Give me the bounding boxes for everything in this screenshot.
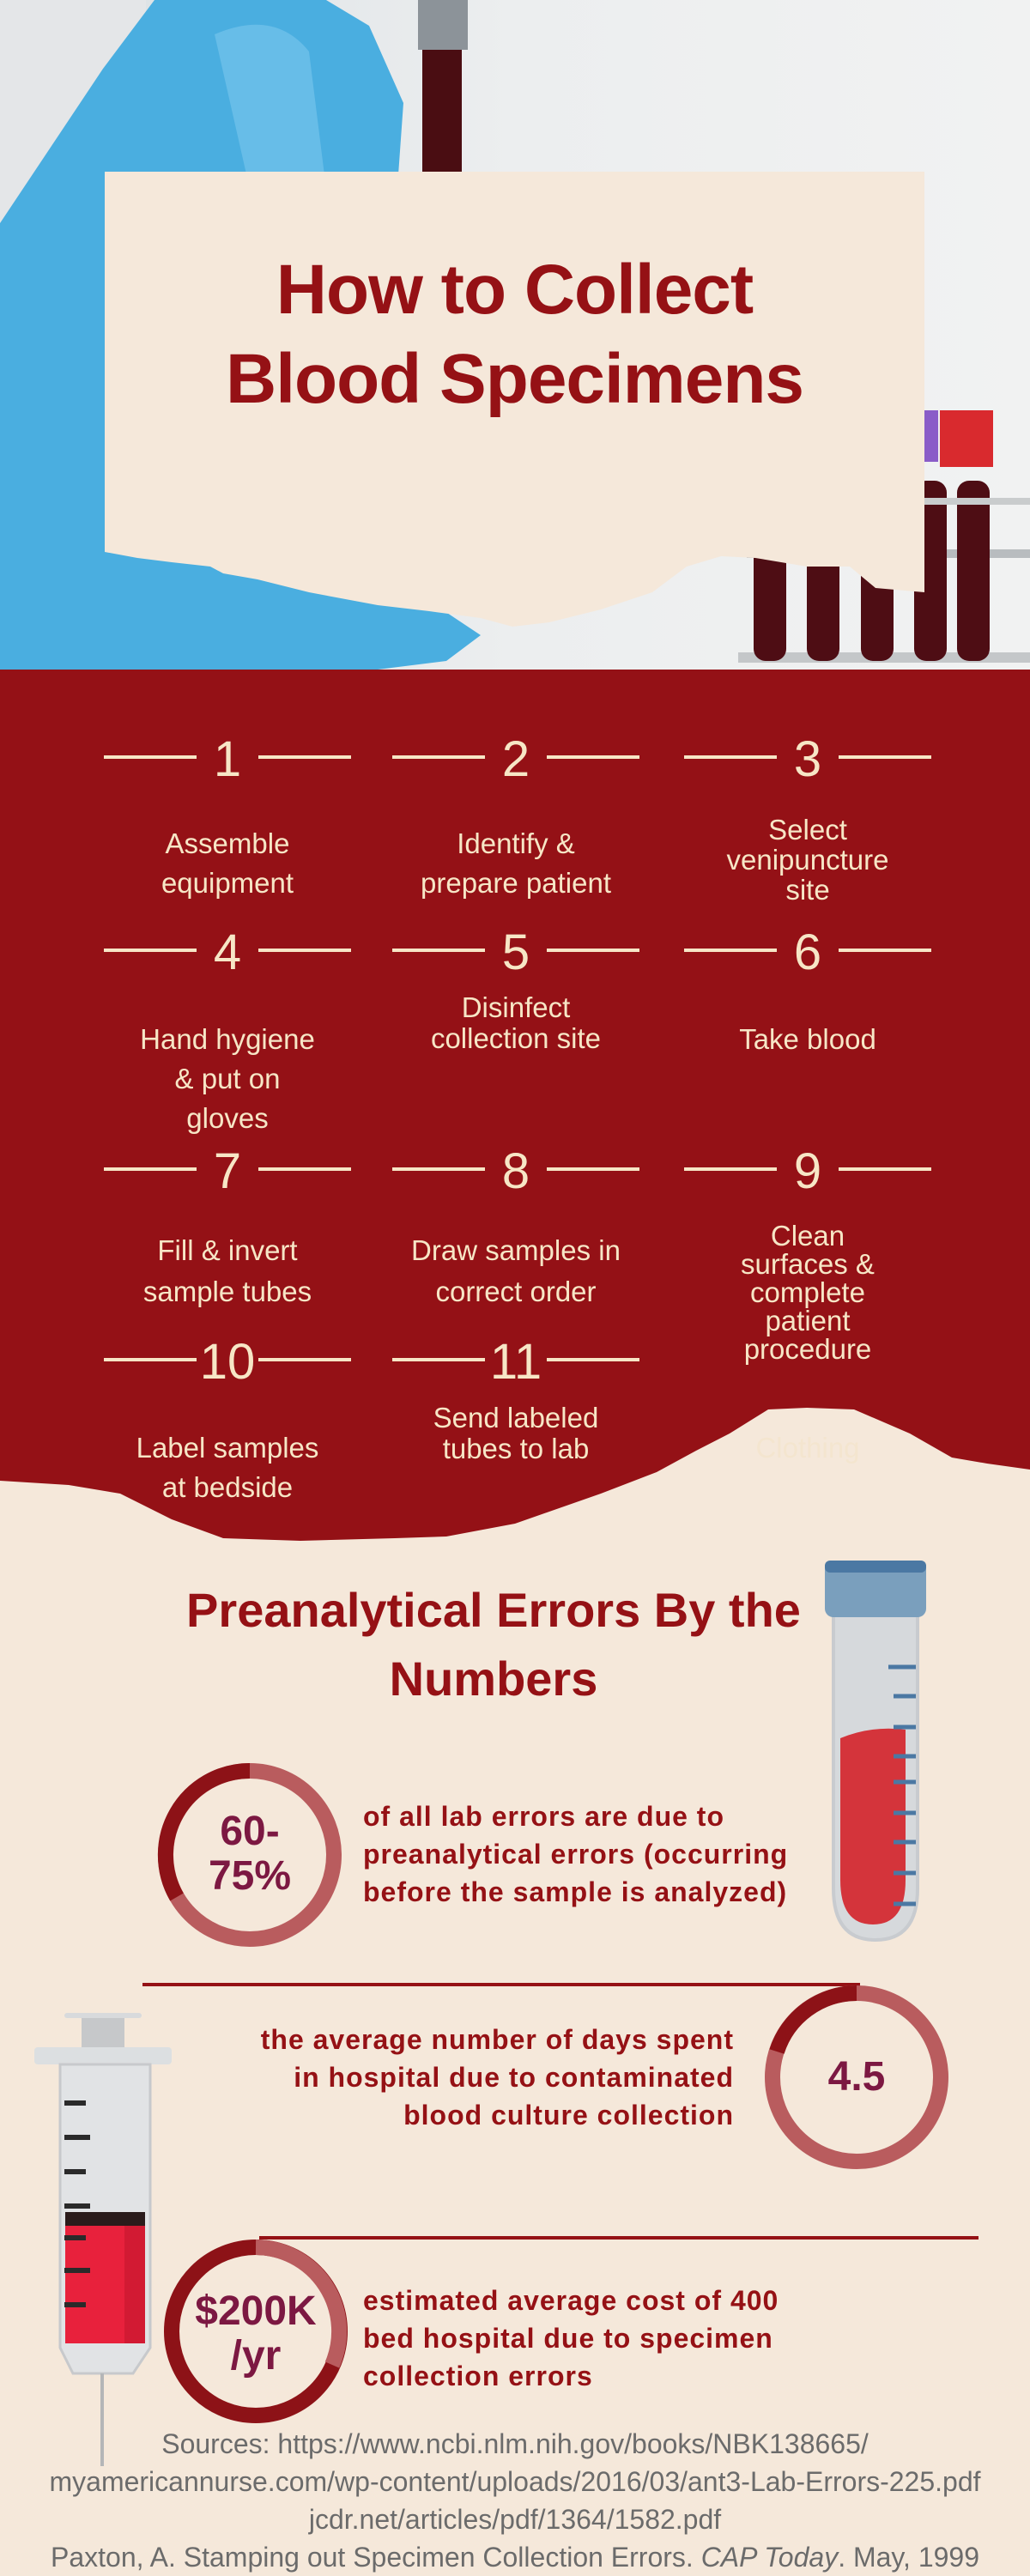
step labels [136,814,888,1503]
title: How to Collect [276,251,753,329]
text: sample tubes [143,1276,312,1307]
text: tubes to lab [443,1433,589,1464]
step numbers [200,731,821,1390]
text: procedure [744,1333,871,1365]
text: prepare patient [421,867,611,899]
text: Fill & invert [157,1234,298,1266]
header photo [0,0,1030,670]
heading: preanalytical errors: Preanalytical Errors By the [186,1583,801,1637]
icon: tube rack [738,410,1030,663]
sources: jcdr.net/articles/pdf/1364/1582.pdf [309,2504,721,2535]
text: Select [768,814,847,846]
text: 7 [214,1143,241,1199]
title [226,251,803,418]
divider 2 [259,2236,978,2240]
text: 5 [502,924,530,980]
sources: Sources: https://www.ncbi.nlm.nih.gov/books/NBK138665/ [161,2428,869,2459]
text: at bedside [162,1471,293,1503]
text: collection site [431,1022,601,1054]
icon: tube held [418,0,468,179]
divider 1 [142,1983,860,1986]
heading: preanalytical errors: Numbers [390,1652,597,1706]
icon: test tube [825,1561,926,1942]
text: 4 [214,924,241,980]
text: gloves [186,1102,269,1134]
text: Label samples [136,1432,318,1464]
stat: 4.5 [261,1985,948,2169]
text: Take blood [739,1023,876,1055]
stat: $200K/yr: /yr [231,2333,281,2379]
stat: 4.5: 4.5 [828,2054,885,2100]
text: 1 [214,731,241,787]
text: 10 [200,1334,255,1390]
text: Clothing [755,1432,860,1464]
text: 11 [490,1334,542,1390]
heading: preanalytical errors [186,1583,801,1706]
stat: 4.5: the average number of days spent in hospital due to contaminated blood culture collection [261,2024,734,2131]
stat: $200K/yr: $200K [195,2288,317,2334]
text: 6 [794,924,821,980]
text: surfaces & [741,1248,875,1280]
text: 9 [794,1143,821,1199]
icon: blue glove upper [0,0,403,635]
text: Send labeled [433,1402,598,1433]
text: 2 [502,731,530,787]
sources [49,2428,981,2573]
text: & put on [175,1063,280,1094]
text: patient [765,1305,851,1336]
sources: myamericannurse.com/wp-content/uploads/2016/03/ant3-Lab-Errors-225.pdf [49,2466,981,2497]
title card [105,172,924,627]
stat: 60-75%: of all lab errors are due to preanalytical errors (occurring before the sample is analyzed) [363,1801,788,1907]
title: Blood Specimens [226,340,803,418]
stat: $200K/yr: estimated average cost of 400 bed hospital due to specimen collection errors [363,2285,779,2391]
text: Disinfect [462,991,570,1023]
text: Clean [771,1220,845,1252]
text: Hand hygiene [140,1023,315,1055]
text: equipment [161,867,294,899]
text: 3 [794,731,821,787]
stat: 60-75%: 75% [209,1853,291,1899]
text: complete [750,1276,865,1308]
stat: $200K/yr [164,2240,779,2423]
text: Draw samples in [411,1234,621,1266]
sources: Paxton, A. Stamping out Specimen Collection Errors. CAP Today. May, 1999 [51,2542,979,2573]
text: 8 [502,1143,530,1199]
text: correct order [435,1276,597,1307]
text: site [785,874,830,906]
text: venipuncture [727,844,888,876]
text: Identify & [457,827,575,859]
icon: blue glove lower [0,464,481,674]
stat: 60-75% [158,1763,788,1947]
panel: steps [0,670,1030,1541]
text: Assemble [166,827,289,859]
icon: syringe [34,2013,172,2466]
stat: 60-75%: 60- [220,1809,280,1854]
